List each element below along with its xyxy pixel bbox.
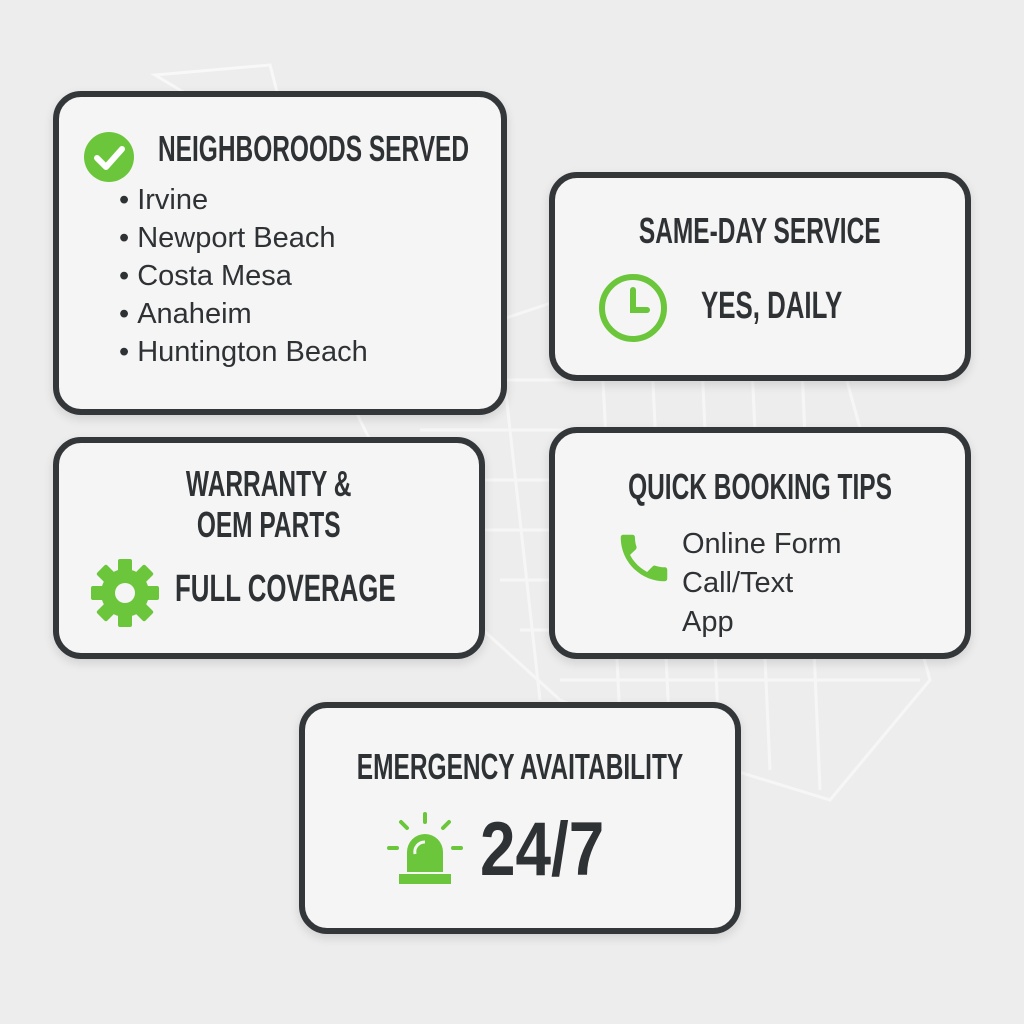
panel: emergency availability [299, 702, 741, 934]
heading: OEM PARTS [197, 504, 341, 545]
panel: warranty [53, 437, 485, 659]
icon: siren [387, 812, 463, 884]
list: • Costa Mesa [119, 260, 292, 292]
heading: WARRANTY & [186, 463, 352, 504]
list: App [682, 606, 734, 638]
heading: QUICK BOOKING TIPS [628, 466, 892, 507]
list: • Anaheim [119, 298, 252, 330]
list: Online Form [682, 528, 842, 560]
value: YES, DAILY [701, 285, 842, 327]
heading [186, 463, 352, 545]
list: • Newport Beach [119, 222, 335, 254]
panel: quick booking tips [549, 427, 971, 659]
list: • Irvine [119, 184, 208, 216]
list: Call/Text [682, 567, 793, 599]
icon: check [84, 132, 134, 182]
icon: clock [599, 274, 667, 342]
heading: SAME-DAY SERVICE [639, 210, 881, 251]
panel: neighborhoods served [53, 91, 507, 415]
list [682, 528, 842, 638]
list [119, 184, 368, 368]
heading: NEIGHBOROODS SERVED [158, 128, 469, 169]
icon: phone [620, 534, 668, 582]
value: FULL COVERAGE [175, 568, 396, 610]
icon: gear [91, 559, 159, 627]
panel: same-day service [549, 172, 971, 381]
list: • Huntington Beach [119, 336, 368, 368]
heading: EMERGENCY AVAITABILITY [357, 746, 683, 787]
value: 24/7 [480, 807, 604, 892]
